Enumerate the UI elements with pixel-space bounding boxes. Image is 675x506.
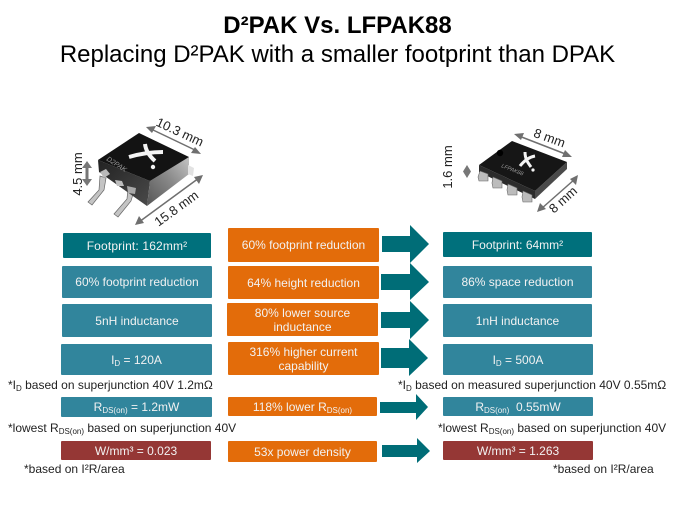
right box: power density: W/mm³ = 1.263 xyxy=(477,444,559,458)
left box: ID xyxy=(61,344,212,375)
left box: inductance xyxy=(62,304,212,337)
left box: RDS(on): RDS(on) = 1.2mW xyxy=(94,400,179,415)
middle box: source inductance: inductance xyxy=(273,320,332,334)
middle box: height reduction xyxy=(228,266,379,299)
dimension: 4.5 mm: 4.5 mm xyxy=(70,152,85,196)
right box: RDS(on): RDS(on) 0.55mW xyxy=(475,400,561,414)
middle box: source inductance xyxy=(227,303,378,336)
dimension: 8 mm right: 8 mm xyxy=(546,183,580,216)
right box: footprint: Footprint: 64mm² xyxy=(472,238,563,252)
icon: D2PAK chip with dimensions: D2PAK xyxy=(105,156,128,174)
middle box: current capability: 316% higher current xyxy=(249,344,358,358)
left box: footprint xyxy=(63,233,211,258)
dimension: 15.8 mm: 15.8 mm xyxy=(151,187,201,229)
right box: space reduction xyxy=(443,266,592,298)
middle box: footprint reduction: 60% footprint reduction xyxy=(242,238,365,252)
right box: footprint xyxy=(443,232,592,257)
note: lowest RDS(on) left: *lowest RDS(on) based on superjunction 40V xyxy=(8,421,236,436)
note: lowest RDS(on) right: *lowest RDS(on) based on superjunction 40V xyxy=(438,421,666,436)
icon: LFPAK88 chip with dimensions xyxy=(440,125,580,216)
icon: LFPAK88 chip with dimensions: LFPAK88 xyxy=(500,163,525,178)
right box: inductance: 1nH inductance xyxy=(476,314,559,328)
right box: RDS(on) xyxy=(443,397,593,416)
arrow 5 xyxy=(380,394,428,420)
right box: space reduction: 86% space reduction xyxy=(461,275,574,289)
note: I2R right: *based on I²R/area xyxy=(553,462,654,476)
subtitle: Replacing D²PAK with a smaller footprint than DPAK xyxy=(60,41,615,68)
arrow 1 xyxy=(382,225,429,263)
note: ID basis right: *ID based on measured superjunction 40V 0.55mΩ xyxy=(398,378,666,393)
left box: footprint: Footprint: 162mm² xyxy=(87,238,187,252)
left box: power density: W/mm³ = 0.023 xyxy=(95,444,177,458)
middle box: lower RDS(on) xyxy=(228,397,377,416)
arrow 2 xyxy=(381,263,429,300)
right box: ID xyxy=(443,344,593,375)
dimension: 8 mm top xyxy=(514,125,572,157)
left box: footprint reduction xyxy=(62,266,212,298)
left box: ID: ID = 120A xyxy=(111,352,162,368)
note: ID basis left: *ID based on superjunction 40V 1.2mΩ xyxy=(8,378,213,393)
dimension: 10.3 mm: 10.3 mm xyxy=(154,114,206,149)
arrow 4 xyxy=(381,339,428,376)
dimension: 8 mm right xyxy=(537,175,580,216)
left box: power density xyxy=(61,441,211,460)
middle box: height reduction: 64% height reduction xyxy=(247,276,360,290)
middle box: source inductance: 80% lower source xyxy=(255,306,350,320)
dimension: 1.6 mm xyxy=(440,145,471,189)
middle box: footprint reduction xyxy=(228,228,379,262)
right box: ID: ID = 500A xyxy=(493,352,543,368)
dimension: 1.6 mm: 1.6 mm xyxy=(440,145,455,189)
middle box: current capability: capability xyxy=(278,358,328,372)
dimension: 8 mm top: 8 mm xyxy=(532,125,567,150)
arrow 6 xyxy=(382,438,430,463)
middle box: current capability xyxy=(228,342,379,375)
right box: power density xyxy=(443,441,593,460)
left box: RDS(on) xyxy=(61,397,212,417)
arrow 3 xyxy=(381,301,429,339)
left box: footprint reduction: 60% footprint reduction xyxy=(75,275,199,289)
right box: inductance xyxy=(443,304,592,337)
icon: D2PAK chip with dimensions xyxy=(70,114,580,229)
middle box: lower RDS(on): 118% lower RDS(on) xyxy=(253,400,352,414)
middle box: power density: 53x power density xyxy=(254,444,351,458)
left box: inductance: 5nH inductance xyxy=(95,314,179,328)
middle box: power density xyxy=(228,441,377,462)
title: D²PAK Vs. LFPAK88 xyxy=(223,12,452,39)
note: I2R left: *based on I²R/area xyxy=(24,462,125,476)
